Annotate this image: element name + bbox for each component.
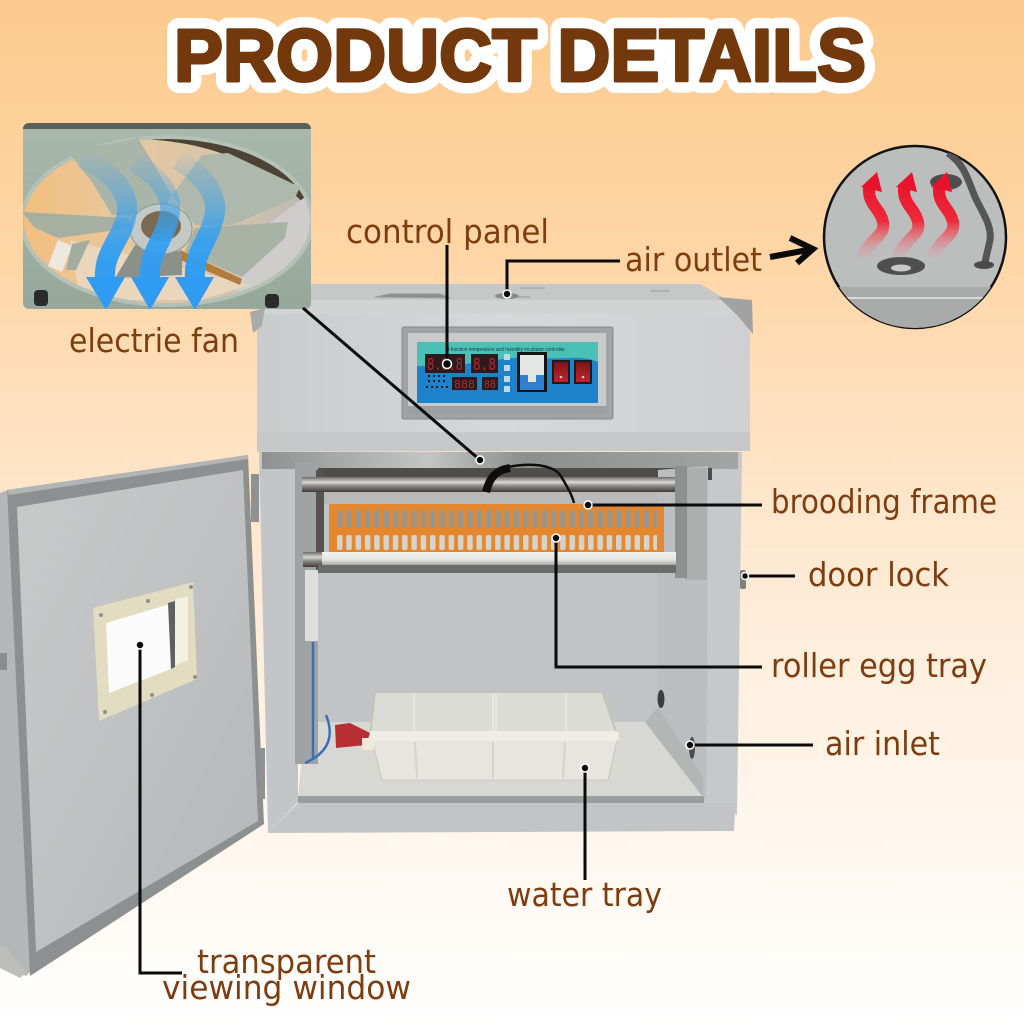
label: air outlet: air outlet — [625, 240, 762, 279]
fan blades — [22, 138, 300, 278]
bottom corner bracket — [0, 945, 27, 978]
air inlet hole lower — [689, 737, 695, 759]
area behind tray — [315, 490, 660, 504]
door lock — [740, 570, 746, 589]
door — [0, 455, 265, 978]
label: brooding frame: brooding frame — [771, 482, 997, 521]
window screws — [99, 585, 197, 714]
bottom rail band — [298, 796, 704, 803]
left tube stub — [303, 552, 323, 567]
lid top plane — [262, 284, 740, 316]
front rail — [322, 552, 676, 565]
door panel — [17, 470, 258, 952]
power switch — [552, 360, 570, 384]
label: electric fan: electrie fan — [69, 321, 239, 360]
air outlet hole — [495, 293, 519, 299]
display 3: 888 — [454, 378, 475, 392]
display 4: 88 — [484, 378, 496, 392]
heat arrows — [862, 188, 883, 258]
upper housing — [257, 314, 750, 452]
right jamb — [704, 452, 742, 815]
top tube — [302, 477, 680, 492]
left jamb — [259, 452, 298, 833]
lid front band — [262, 300, 738, 315]
window frame — [93, 582, 197, 721]
egg tray — [329, 504, 664, 553]
white conduit — [305, 570, 318, 641]
teal band — [417, 342, 598, 366]
corner bracket left — [250, 308, 265, 333]
left column — [295, 462, 318, 764]
door frame — [7, 455, 264, 976]
display 2 — [471, 354, 498, 376]
display 2: 8.8 — [473, 356, 496, 376]
foot right — [265, 294, 279, 308]
led dots — [426, 376, 448, 387]
housing bottom strip — [257, 432, 750, 451]
red heating probe — [335, 723, 370, 748]
wire bundle — [486, 465, 574, 503]
label: door lock: door lock — [808, 555, 950, 594]
arrow to detail circle — [770, 238, 813, 263]
incubator cabinet — [250, 284, 753, 833]
water tray — [369, 692, 619, 780]
label: air inlet: air inlet — [825, 724, 940, 763]
lower pale — [70, 240, 250, 300]
door side strip — [0, 490, 30, 976]
cable — [948, 153, 990, 263]
bottom plate — [268, 803, 737, 833]
upper right wall — [685, 468, 707, 580]
door top highlight — [7, 455, 248, 495]
white nozzle — [362, 738, 374, 750]
airflow arrows — [82, 158, 215, 310]
dark top of interior — [295, 468, 712, 480]
left rack chain — [316, 470, 324, 570]
window reveal — [175, 596, 188, 666]
lower band — [839, 287, 991, 328]
fan photo inset — [20, 123, 315, 310]
fan housing — [23, 123, 311, 309]
panel face — [417, 342, 598, 403]
label: roller egg tray: roller egg tray — [771, 646, 987, 685]
label: transparent: transparent — [197, 942, 376, 981]
title: PRODUCT DETAILS — [174, 14, 866, 97]
label: control panel: control panel — [346, 212, 549, 251]
buttons — [504, 354, 510, 392]
interior back wall — [296, 462, 708, 724]
label: viewing window: viewing window — [162, 968, 411, 1007]
panel heading: ti function temperature and humidity incubator controller — [447, 347, 565, 353]
upper hinge — [251, 474, 259, 522]
circle fill — [824, 146, 1006, 328]
lid hardware — [375, 288, 670, 298]
window dark strip — [168, 601, 175, 669]
panel frame — [402, 327, 613, 419]
label: water tray: water tray — [507, 875, 662, 914]
control panel — [402, 327, 613, 419]
breaker — [517, 352, 547, 392]
latch — [0, 653, 7, 670]
blue wire — [305, 642, 330, 763]
leader lines — [136, 245, 813, 973]
corner bracket right — [718, 297, 753, 334]
air outlet detail circle — [820, 146, 1010, 332]
heater switch — [574, 360, 592, 384]
opening rim — [22, 137, 312, 305]
lower hinge — [260, 748, 265, 799]
foot left — [34, 290, 48, 306]
air inlet hole upper — [658, 690, 664, 708]
vent hole upper — [930, 174, 962, 190]
vent hole — [877, 257, 925, 275]
fan hub — [130, 204, 192, 254]
display 1 — [425, 354, 465, 376]
title: PRODUCT DETAILS — [174, 14, 866, 97]
right post — [675, 466, 687, 578]
upper dark band — [150, 139, 304, 200]
lintel — [262, 452, 738, 469]
tan strip — [176, 250, 242, 285]
display 1: 8.8.8 — [427, 356, 463, 376]
angle plate — [645, 707, 703, 797]
right grey — [236, 198, 310, 292]
fan opening — [24, 139, 310, 303]
window glass — [106, 604, 171, 693]
floor — [298, 722, 704, 798]
rail shadow — [318, 565, 676, 573]
right side wall — [658, 466, 708, 800]
